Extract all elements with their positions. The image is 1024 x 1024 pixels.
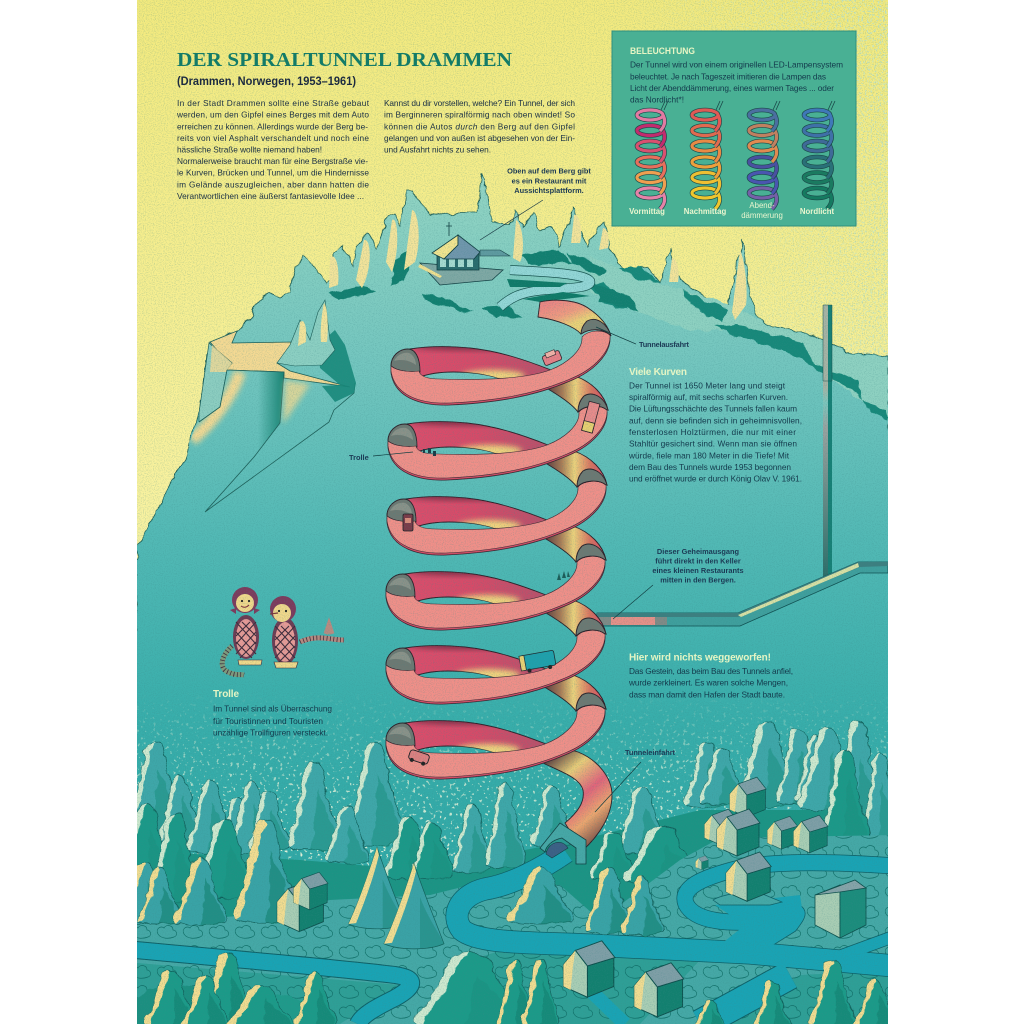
cliff (180, 300, 356, 515)
ventilation shaft (823, 305, 832, 578)
intro text column 1 (176, 98, 370, 201)
subtitle: (Drammen, Norwegen, 1953–1961) (177, 76, 356, 88)
text: Der Tunnel ist 1650 Meter lang und steigt (629, 380, 786, 390)
car on coil 3 (403, 514, 413, 531)
ground (125, 835, 900, 1024)
intro text column 1: im Gelände auszugleichen, aber dann hatten die (177, 179, 369, 189)
summit road (500, 270, 590, 307)
heading: Hier wird nichts weggeworfen! (629, 653, 771, 664)
spiral: Vormittag (637, 101, 668, 209)
illustration background: sky (137, 0, 888, 1024)
intro text column 2: gelangen und von außen ist abgesehen von der Ein- (384, 133, 575, 143)
intro text column 1: erreichen zu können. Allerdings wurde der Berg be- (177, 121, 368, 131)
coil 3 (387, 450, 607, 555)
back row trees (129, 720, 900, 874)
intro text column 1: Normalerweise braucht man für eine Bergstraße vie- (177, 156, 368, 166)
troll figures in coil 2 (423, 448, 436, 456)
text: Die Lüftungsschächte des Tunnels fallen kaum (629, 404, 797, 414)
intro text column 2: Kannst du dir vorstellen, welche? Ein Tunnel, der sich (384, 98, 575, 108)
panel text: Der Tunnel wird von einem originellen LED-Lampensystem (630, 60, 843, 70)
panel: Hier wird nichts weggeworfen (628, 653, 793, 699)
houses (277, 777, 828, 1017)
trolls (222, 587, 344, 675)
spiral labels: dämmerung (741, 211, 783, 220)
troll 2 (270, 596, 344, 668)
stone portal of tunnel entrance (540, 823, 586, 864)
spiral: Abenddämmerung (749, 101, 780, 209)
callout: Geheimausgang (613, 547, 744, 619)
panel heading: BELEUCHTUNG (630, 45, 695, 56)
spiral labels: Abend- (749, 201, 775, 210)
spiral labels (629, 201, 835, 220)
panel: Beleuchtung (612, 31, 856, 226)
conical trees (348, 847, 444, 949)
panel text: Licht der Abenddämmerung, eines warmen Tages ... oder (630, 83, 834, 93)
spiral: Nachmittag (692, 101, 723, 209)
spiral: Nordlicht (804, 101, 835, 209)
panel: Trolle (213, 689, 332, 738)
pale speckle field (137, 696, 888, 866)
text: spiralförmig auf, mit sechs scharfen Kurven. (629, 392, 788, 402)
large building (815, 880, 866, 938)
intro text column 2: im Berginneren spiralförmig nach oben windet! So (384, 110, 575, 120)
car on coil 6 (407, 749, 430, 767)
coil 6 (386, 674, 606, 779)
text: auf, denn sie befinden sich in geheimnisvollen, (629, 415, 802, 425)
leader line: restaurant (480, 200, 543, 240)
restaurant on summit (418, 222, 510, 285)
intro text column 1: hässliche Straße wollte niemand haben! (177, 145, 322, 155)
heading: Trolle (213, 689, 239, 700)
text: würde, fiele man 180 Meter in die Tiefe! Mit (628, 450, 790, 460)
text: für Touristinnen und Touristen (213, 716, 323, 726)
text: wurde zerkleinert. Es waren solche Mengen, (628, 678, 788, 688)
spiral labels: Nachmittag (684, 207, 726, 216)
text: dass man damit den Hafen der Stadt baute. (629, 689, 785, 699)
title: DER SPIRALTUNNEL DRAMMEN (177, 49, 513, 71)
intro text column 2: können die Autos durch den Berg auf den Gipfel (384, 121, 575, 131)
intro text column 1: reits von viel Asphalt verschandelt und noch eine (177, 133, 369, 143)
heading: Viele Kurven (629, 367, 687, 378)
spiral tunnel (386, 300, 612, 851)
spire highlights on summit (329, 210, 747, 320)
callout: Tunneleinfahrt (595, 748, 676, 812)
coil 5 (386, 599, 606, 704)
coil 1 (391, 331, 610, 405)
panel text: beleuchtet. Je nach Tageszeit imitieren die Lampen das (630, 71, 826, 81)
bus on coil 5 (519, 650, 556, 674)
callout: Geheimausgang: Dieser Geheimausgang (657, 547, 740, 556)
callout: Tunnelausfahrt (596, 327, 690, 349)
intro text column 1: werden, um den Gipfel eines Berges mit dem Auto (176, 110, 369, 120)
mountain (125, 173, 900, 1024)
text: Im Tunnel sind als Überraschung (213, 704, 332, 714)
panel text (630, 60, 843, 105)
callout: restaurant: es ein Restaurant mit (512, 176, 587, 186)
intro text column 1: In der Stadt Drammen sollte eine Straße gebaut (177, 98, 370, 108)
plateau trees (277, 300, 335, 366)
panel text: das Nordlicht*! (630, 95, 684, 105)
text (628, 380, 802, 484)
tunnel exit tube (538, 300, 611, 336)
spiral labels: Nordlicht (800, 207, 835, 216)
callout: Trolle (349, 452, 413, 462)
forest back dark band (125, 810, 900, 930)
car on coil 1 (541, 348, 562, 366)
grain overlay (137, 0, 888, 1024)
callout: Geheimausgang: führt direkt in den Keller (655, 556, 741, 566)
right slope dark bands (590, 266, 887, 420)
lower foreground trees (125, 952, 896, 1024)
figures on coil 4 (557, 571, 570, 580)
text (628, 666, 793, 699)
lower ground green (125, 948, 900, 1024)
intro text column 1: Verantwortlichen eine äußerst fantasievolle Idee ... (177, 191, 364, 201)
text: Stahltür gesichert sind. Wenn man sie öffnen (629, 439, 797, 449)
sky speckle (137, 0, 888, 600)
text: fensterlosen Holztürmen, die nur mit einer (629, 427, 796, 437)
roads (125, 852, 895, 1024)
text (213, 704, 332, 738)
text: Das Gestein, das beim Bau des Tunnels anfiel, (629, 666, 793, 676)
secret exit corridor (597, 562, 888, 626)
callout: Geheimausgang: mitten in den Bergen. (660, 576, 736, 584)
text: unzählige Trollfiguren versteckt. (213, 728, 328, 738)
troll 1 (222, 587, 262, 675)
callout: Tunnelausfahrt: Tunnelausfahrt (639, 340, 690, 349)
bus in coil 2 (582, 401, 600, 433)
intro text column 2: und Ausfahrt nichts zu sehen. (384, 145, 491, 155)
mid row trees (123, 750, 869, 904)
callout: restaurant: Aussichtsplattform. (514, 186, 584, 195)
text: dem Bau des Tunnels wurde 1953 begonnen (629, 462, 791, 472)
intro text column 1: le Kurven, Brücken und Tunnel, um die Hindernisse (177, 168, 369, 178)
right slope pale band (590, 255, 888, 420)
intro text column 2 (384, 98, 575, 155)
callout: Geheimausgang: eines kleinen Restaurants (652, 566, 744, 575)
coil 2 (388, 375, 608, 480)
callout: restaurant (507, 166, 591, 195)
callout: Tunneleinfahrt: Tunneleinfahrt (625, 748, 676, 757)
callout: restaurant: Oben auf dem Berg gibt (507, 166, 591, 176)
front trees with yellow highlight (123, 820, 663, 935)
summit dark undergrowth (330, 240, 640, 318)
forest (123, 720, 900, 1024)
callout: Trolle: Trolle (349, 453, 369, 462)
coil 4 (386, 525, 606, 630)
tunnel entrance tube (543, 750, 612, 851)
text: und eröffnet wurde er durch König Olav V. 1961. (629, 474, 802, 484)
panel: Viele Kurven (628, 367, 802, 484)
spiral labels: Vormittag (629, 207, 665, 216)
